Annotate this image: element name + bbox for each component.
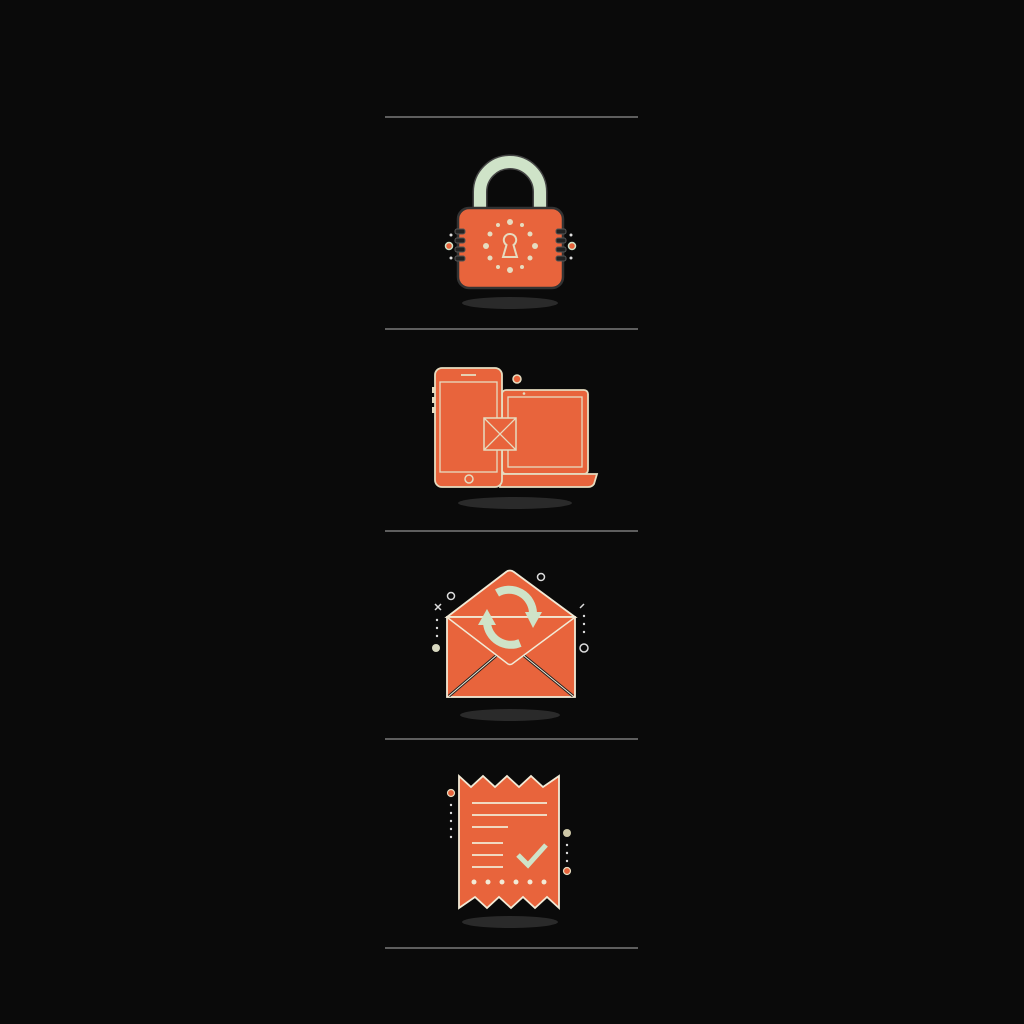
icon: envelope with sync arrows — [432, 570, 588, 721]
icon: padlock — [446, 162, 576, 309]
icon: receipt with checkmark — [448, 776, 571, 928]
icon: phone and laptop — [432, 368, 597, 509]
